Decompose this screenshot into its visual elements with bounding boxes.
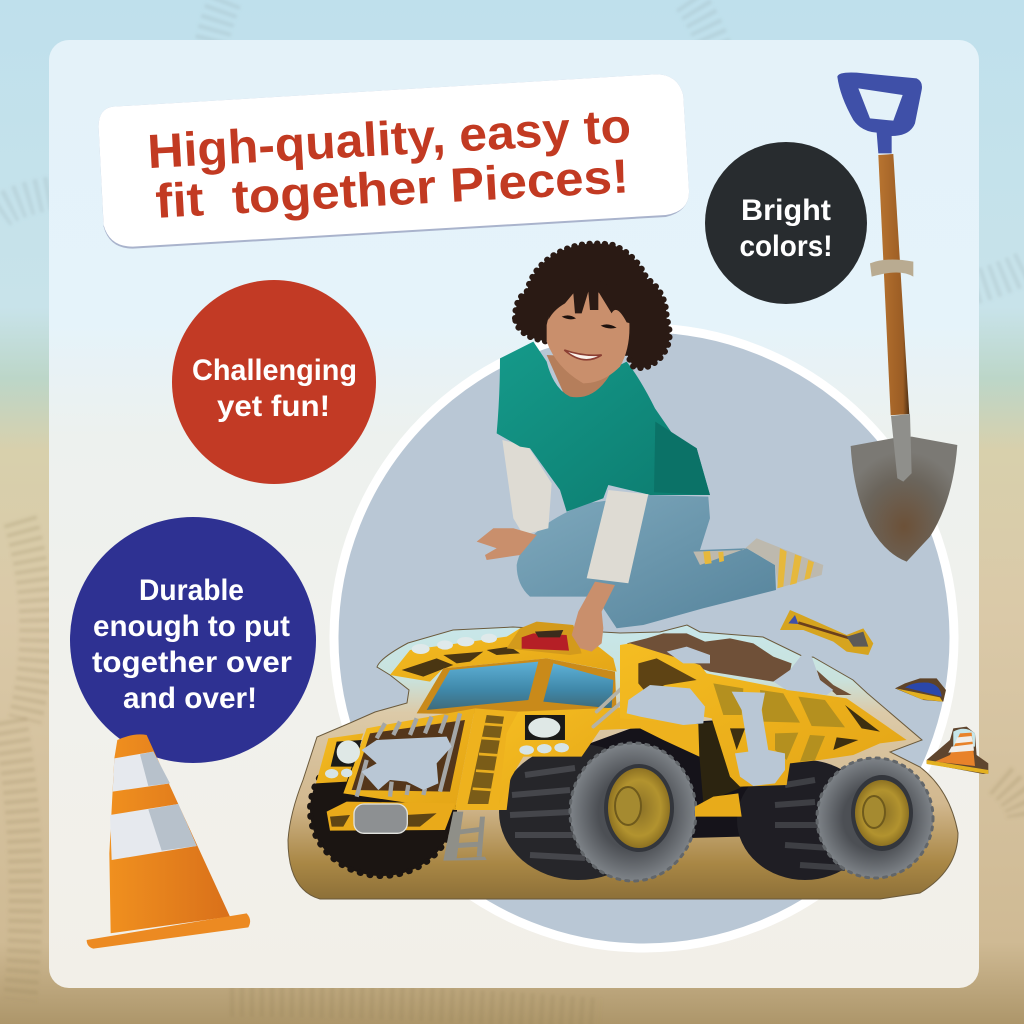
hair [515, 243, 670, 368]
puzzle holes [627, 647, 833, 786]
wheel: front left [310, 744, 454, 876]
body frame [620, 643, 907, 787]
callout: durable: enough to put [93, 610, 290, 643]
jeans [517, 495, 776, 628]
dump body [620, 633, 907, 817]
chassis shadow [490, 720, 800, 840]
right arm and hand [572, 582, 615, 652]
wheel: middle [499, 743, 696, 881]
callout: challenging [172, 280, 376, 484]
windshield frame [417, 658, 617, 715]
left fender and headlight [316, 733, 363, 783]
neck [547, 355, 617, 400]
puzzle: dump truck [288, 622, 958, 899]
winch [354, 804, 407, 833]
bumper [327, 802, 455, 831]
piece: hard hat [895, 678, 946, 702]
wheel: rear [737, 758, 933, 880]
callout: durable [70, 517, 316, 763]
step [695, 793, 742, 817]
rear chassis [697, 720, 743, 803]
grill hole [362, 737, 452, 790]
ladder panel [455, 708, 518, 810]
loose puzzle pieces [780, 610, 988, 774]
steps [443, 812, 487, 861]
icon: traffic cone [87, 734, 250, 949]
callout: bright colors: Bright [741, 194, 831, 227]
puzzle base shape [288, 625, 958, 899]
title text: High-quality, easy to [146, 100, 632, 179]
grill and hood [343, 708, 475, 810]
left sleeve [502, 440, 552, 535]
smile [564, 350, 602, 360]
shirt [497, 342, 710, 512]
callout: bright colors [705, 142, 867, 304]
right sleeve [587, 490, 648, 583]
piece: shovel [780, 610, 873, 655]
callout: challenging: Challenging [192, 354, 357, 387]
cab side panel [498, 707, 640, 807]
callout: durable: together over [92, 646, 292, 679]
dirt load [627, 633, 792, 682]
shirt shade [654, 422, 710, 495]
sock [693, 538, 823, 588]
callout: bright colors: colors! [740, 230, 832, 263]
icon: shovel [837, 72, 957, 562]
piece: cone [927, 727, 988, 774]
callout: challenging: yet fun! [217, 390, 330, 423]
toolbox piece [507, 622, 582, 655]
title banner [99, 74, 689, 249]
title text [146, 100, 632, 229]
truck cab [316, 622, 640, 861]
fringe curls [548, 278, 631, 323]
large circle backdrop [334, 328, 954, 948]
canopy [390, 627, 617, 682]
recessed panels [713, 683, 845, 762]
title text: fit together Pieces! [154, 150, 630, 229]
callout: durable: and over! [123, 682, 257, 715]
callout: durable: Durable [139, 574, 244, 607]
face [547, 290, 629, 383]
eyes [562, 315, 617, 328]
child [477, 243, 823, 652]
left hand [477, 528, 537, 560]
